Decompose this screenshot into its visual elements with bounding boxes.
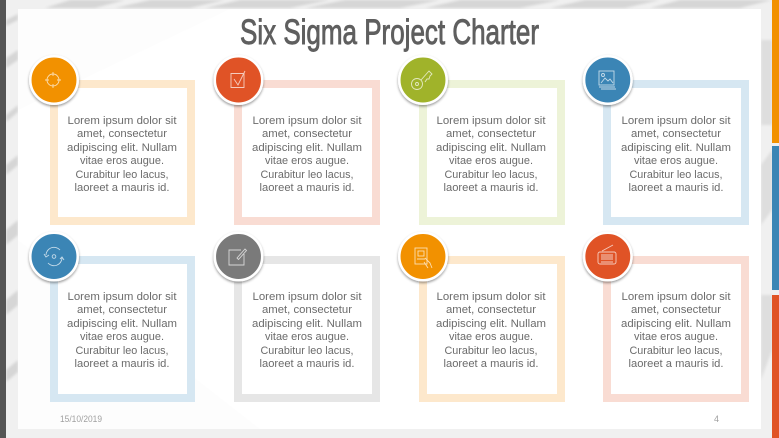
page number: 4: [714, 414, 719, 424]
right accent bars: [772, 0, 779, 438]
card 4: blue pictures: [584, 56, 745, 221]
icon: checkbox: [215, 56, 262, 104]
card 1: orange target: [30, 56, 191, 221]
card 3: green key: [399, 56, 561, 221]
icon: key: [399, 56, 447, 104]
card 6: grey edit: [215, 233, 376, 398]
title: Six Sigma Project Charter: [240, 13, 539, 52]
icon: document with hand: [399, 233, 447, 280]
left side bar: [0, 0, 6, 438]
icon: radio: [584, 233, 632, 280]
icon: pictures: [584, 56, 632, 104]
card 2: red checkbox: [215, 56, 376, 221]
card 5: blue cycle: [30, 233, 191, 398]
icon: target: [30, 56, 78, 104]
footer date: 15/10/2019: [60, 414, 102, 424]
card 8: red radio: [584, 233, 745, 398]
icon: cycle: [30, 233, 78, 280]
card 7: orange document: [399, 233, 561, 398]
icon: edit note: [215, 233, 262, 280]
